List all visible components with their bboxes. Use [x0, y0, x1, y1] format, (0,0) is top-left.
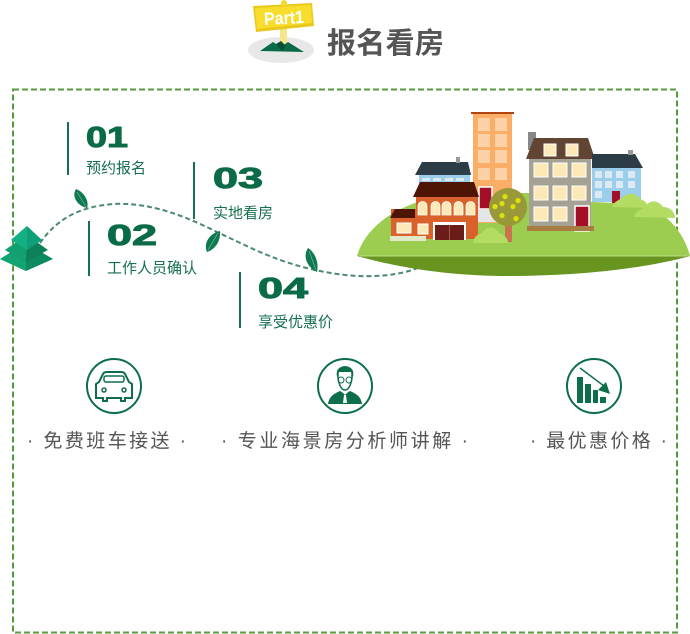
- step 04: 享受优惠价: [258, 314, 333, 331]
- dashed route line: [40, 204, 418, 276]
- step 02: [88, 220, 197, 277]
- icon: consultant: [318, 359, 372, 413]
- step 04: [239, 272, 333, 331]
- step 01: [67, 122, 146, 177]
- illustration: island with houses: [357, 112, 690, 276]
- blue back house: [415, 157, 471, 187]
- orange tower: [471, 112, 514, 223]
- icon: leaf 1: [74, 189, 88, 208]
- step 03: 03: [213, 163, 263, 195]
- bushes: [473, 194, 675, 243]
- caption: best price: · 最优惠价格 ·: [530, 430, 667, 452]
- grey house: [526, 132, 595, 231]
- icon: falling price chart: [567, 359, 621, 413]
- step 04: 04: [258, 273, 308, 305]
- step 01: 01: [86, 122, 128, 154]
- step 03: [193, 162, 273, 222]
- step 02: 02: [107, 220, 157, 252]
- icon: green tree: [0, 226, 53, 271]
- icon: part 1 signpost: Part1: [264, 7, 304, 29]
- blue right house: [592, 150, 643, 203]
- caption: sea view consultant: · 专业海景房分析师讲解 ·: [221, 430, 468, 452]
- icon: part 1 signpost: [248, 0, 314, 63]
- caption: free shuttle: · 免费班车接送 ·: [27, 430, 186, 452]
- island: [357, 193, 690, 276]
- round fruit tree: [489, 188, 527, 242]
- step 01: 预约报名: [86, 160, 146, 177]
- step 03: 实地看房: [213, 205, 273, 222]
- step 02: 工作人员确认: [107, 260, 197, 277]
- orange brick house: [390, 182, 479, 241]
- icon: car: [87, 359, 141, 413]
- title: 报名看房: [327, 27, 444, 60]
- icon: leaf 3: [306, 248, 318, 272]
- icon: leaf 2: [206, 231, 220, 252]
